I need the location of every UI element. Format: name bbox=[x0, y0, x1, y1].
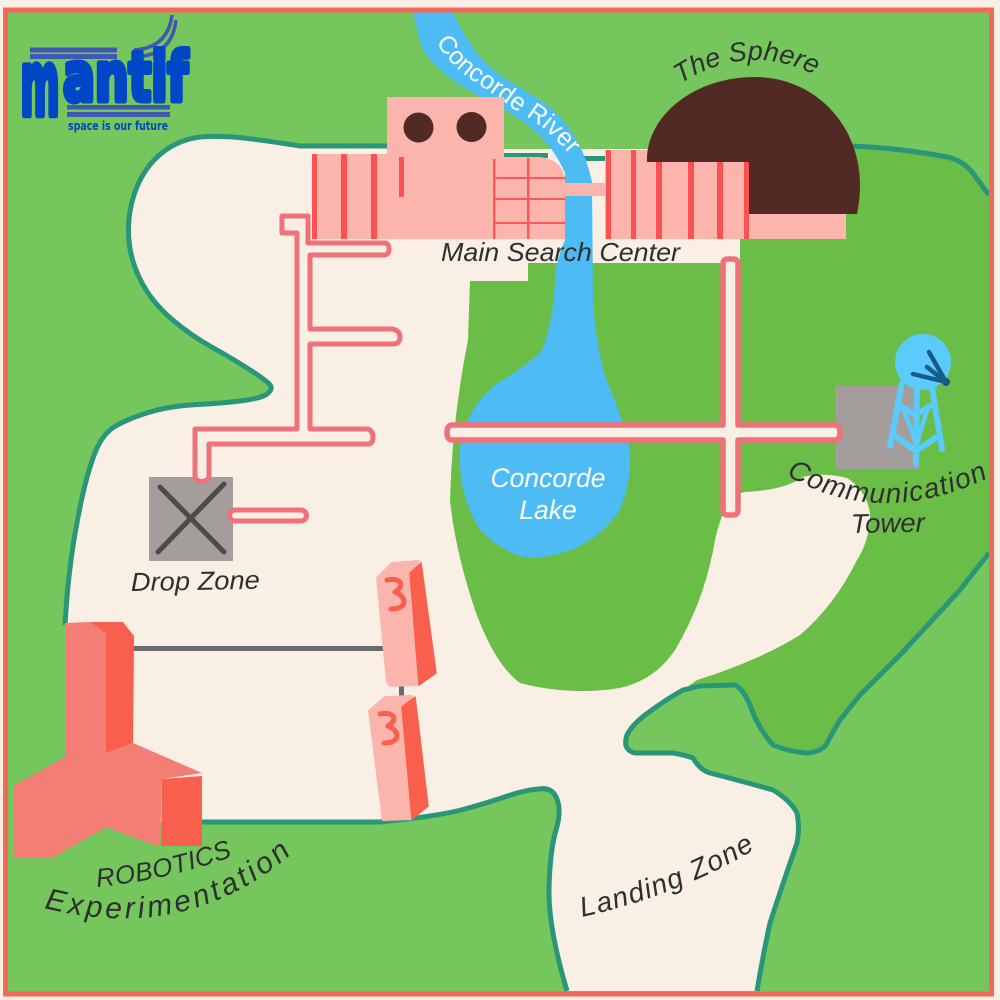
label: Concorde Lake: Concorde bbox=[491, 463, 605, 493]
module: lower robotics pod bbox=[369, 696, 428, 820]
communication tower base bbox=[835, 386, 919, 469]
module: upper robotics pod bbox=[377, 561, 436, 686]
road stub by drop zone bbox=[230, 510, 306, 521]
drop zone square bbox=[149, 477, 233, 561]
logo: mantif: space is our future bbox=[68, 119, 168, 133]
label: Communication: Communication bbox=[790, 462, 986, 504]
label: Landing Zone: Landing Zone bbox=[582, 838, 752, 917]
logo: mantif bbox=[20, 15, 189, 136]
panel: dark green parkland bbox=[450, 146, 989, 753]
label: Experimentation: Experimentation bbox=[45, 844, 289, 922]
panel: The Sphere building bbox=[605, 77, 860, 239]
connector cables bbox=[130, 646, 404, 698]
dome bbox=[647, 77, 860, 214]
panel: main search center building bbox=[312, 97, 605, 239]
logo: mantif: antif bbox=[63, 38, 189, 118]
road network: east cross bbox=[447, 259, 840, 515]
logo: mantif: m bbox=[20, 32, 60, 136]
river and Concorde Lake bbox=[413, 12, 630, 558]
label: ROBOTICS: ROBOTICS bbox=[98, 840, 230, 887]
river label: Concorde River bbox=[439, 36, 580, 152]
label: Main Search Center: Main Search Center bbox=[441, 237, 681, 267]
label: Drop Zone: Drop Zone bbox=[131, 565, 260, 597]
label: The Sphere: The Sphere bbox=[673, 41, 818, 81]
road network: west bbox=[195, 216, 400, 482]
rooftop domes bbox=[404, 112, 486, 142]
label: Concorde Lake: Lake bbox=[519, 495, 577, 525]
terrain edge lines bbox=[65, 136, 989, 991]
icon: communication tower bbox=[890, 334, 951, 464]
panel: cream ground area bbox=[65, 136, 880, 991]
building: robotics experimentation bbox=[13, 622, 202, 858]
label: Tower: Tower bbox=[851, 508, 926, 539]
